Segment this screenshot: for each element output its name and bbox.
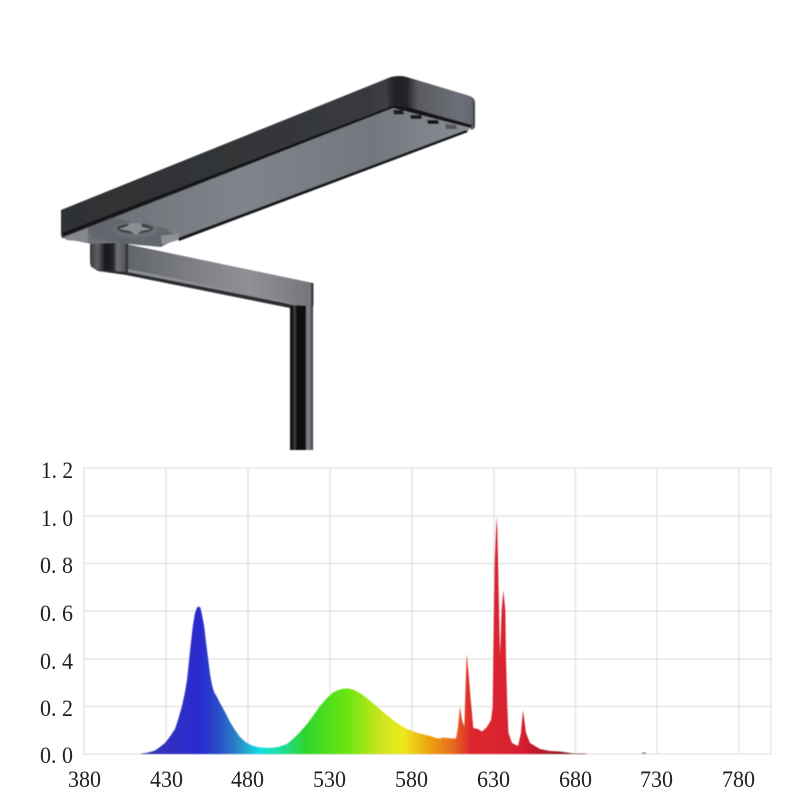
lamp mount plate and knob [88,218,180,247]
y axis labels: 0. 4 [40,649,73,674]
x axis labels [68,767,755,792]
y axis labels: 0. 2 [40,696,73,721]
x axis labels: 580 [395,767,428,792]
x axis labels: 430 [150,767,183,792]
x axis labels: 680 [559,767,592,792]
y axis labels: 0. 0 [40,743,73,768]
spectrum curve with rainbow fill [141,516,646,754]
y axis labels: 0. 8 [40,553,73,578]
chart grid [84,468,771,754]
lamp arm [90,244,314,308]
lamp pole [290,305,313,450]
y axis labels: 0. 6 [40,601,73,626]
x axis labels: 780 [722,767,755,792]
y axis labels [40,458,73,768]
lamp head: underside panel [62,106,472,244]
lamp hinge [90,238,128,272]
x axis labels: 530 [313,767,346,792]
x axis labels: 730 [640,767,673,792]
x axis labels: 480 [231,767,264,792]
y axis labels: 1. 2 [41,458,73,483]
spectrum chart [40,458,771,792]
lamp head: indicator windows [393,110,457,129]
illustration: lamp fixture [61,76,475,450]
y axis labels: 1. 0 [41,506,73,531]
lamp head: end face [386,76,475,130]
x axis labels: 630 [477,767,510,792]
lamp head: top long face [61,76,405,238]
x axis labels: 380 [68,767,101,792]
